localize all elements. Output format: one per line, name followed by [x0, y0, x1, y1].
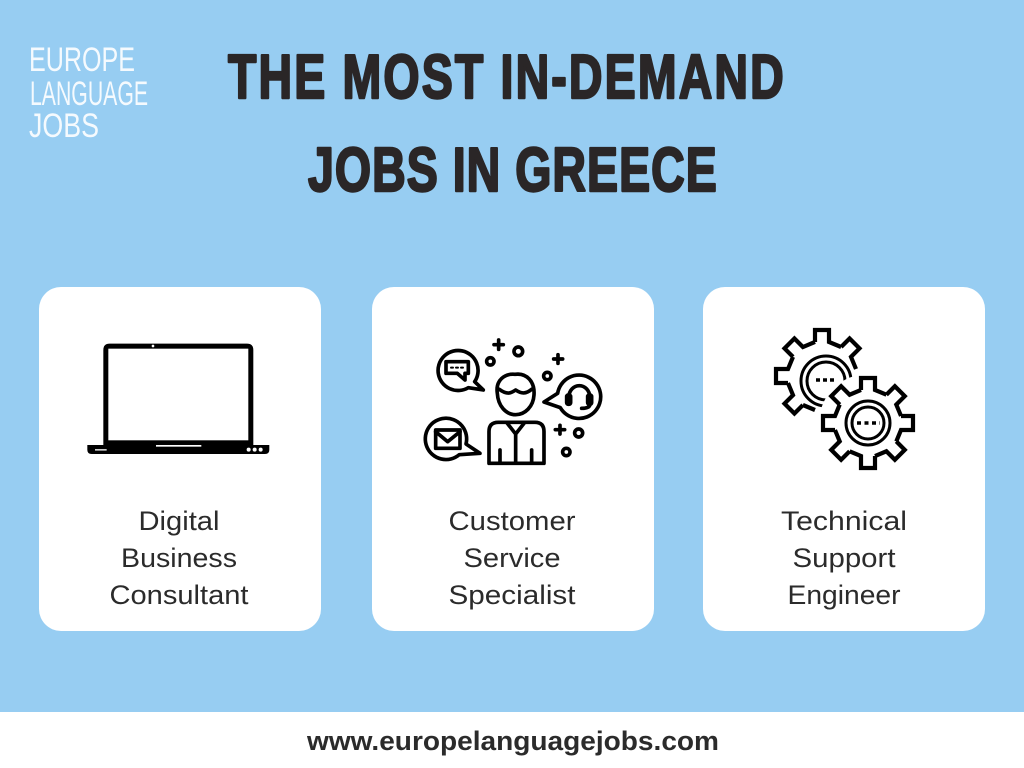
- label: Customer Service Specialist: Service: [464, 543, 560, 573]
- label: Digital Business Consultant: Consultant: [110, 580, 249, 610]
- label: Customer Service Specialist: Specialist: [448, 580, 576, 610]
- label: Digital Business Consultant: [110, 506, 249, 610]
- white gap behind small gear: [819, 374, 917, 472]
- icon: gears: [776, 330, 917, 472]
- panel: Technical Support Engineer: [703, 287, 985, 631]
- logo: Europe Language Jobs: EUROPE: [29, 41, 135, 79]
- panel: Digital Business Consultant: [39, 287, 321, 631]
- title: JOBS IN GREECE: [308, 134, 717, 205]
- logo: Europe Language Jobs: JOBS: [29, 107, 99, 145]
- title: THE MOST IN-DEMAND: [228, 41, 784, 112]
- logo: Europe Language Jobs: [29, 41, 148, 145]
- logo: Europe Language Jobs: LANGUAGE: [30, 75, 148, 113]
- label: Technical Support Engineer: Support: [792, 543, 896, 573]
- label: Technical Support Engineer: Technical: [781, 506, 907, 536]
- label: Digital Business Consultant: Business: [121, 543, 237, 573]
- icon: laptop: [87, 344, 269, 454]
- website URL: www.europelanguagejobs.com: [306, 726, 719, 756]
- label: Technical Support Engineer: [781, 506, 907, 610]
- label: Customer Service Specialist: [448, 506, 576, 610]
- label: Customer Service Specialist: Customer: [448, 506, 576, 536]
- label: Technical Support Engineer: Engineer: [788, 580, 900, 610]
- footer bar: [0, 712, 1024, 768]
- title: [228, 41, 784, 205]
- panel: Customer Service Specialist: [372, 287, 654, 631]
- large gear: [776, 330, 868, 413]
- label: Digital Business Consultant: Digital: [138, 506, 220, 536]
- icon: customer service agent: [425, 340, 601, 463]
- small gear: [823, 378, 913, 468]
